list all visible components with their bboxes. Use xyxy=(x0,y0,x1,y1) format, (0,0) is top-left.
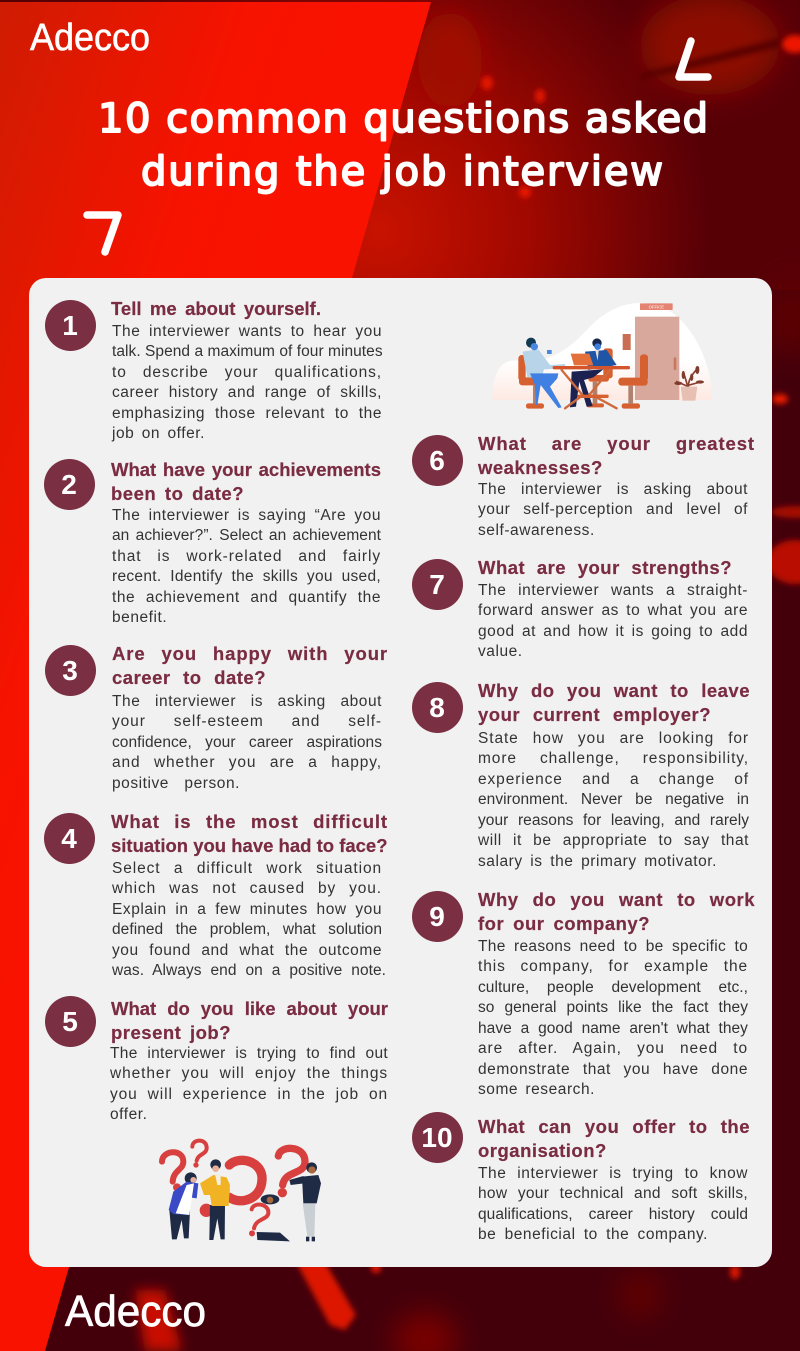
question 8: State how you are looking for xyxy=(478,730,749,747)
question 5 xyxy=(45,996,388,1123)
decorative corner: top right xyxy=(675,37,712,81)
question 8: Why do you want to leave xyxy=(478,680,750,700)
question 2: recent. Identify the skills you used, xyxy=(112,568,381,585)
question 9 xyxy=(412,888,755,1098)
question 9: demonstrate that you have done xyxy=(478,1061,748,1078)
question 1: to describe your qualifications, xyxy=(112,364,382,381)
question 10: be beneficial to the company. xyxy=(478,1226,708,1243)
question 9: culture, people development etc., xyxy=(478,979,748,996)
question 6: your self-perception and level of xyxy=(478,501,748,518)
illustration: office interview xyxy=(492,303,712,410)
question 7: value. xyxy=(478,643,523,660)
question 4: defined the problem, what solution xyxy=(112,921,382,938)
question 4 xyxy=(44,810,388,979)
question 5: What do you like about your xyxy=(111,998,388,1018)
question 2: The interviewer is saying “Are you xyxy=(112,507,381,524)
question 8 xyxy=(412,680,750,870)
question 9: this company, for example the xyxy=(478,958,748,975)
question 3: confidence, your career aspirations xyxy=(112,734,382,751)
title: during the job interview xyxy=(141,149,663,195)
question 1: The interviewer wants to hear you xyxy=(112,323,382,340)
question 2: 2 xyxy=(61,469,77,500)
question 8: will it be appropriate to say that xyxy=(478,832,749,849)
question 5: 5 xyxy=(62,1006,78,1037)
question 7: good at and how it is going to add xyxy=(478,623,748,640)
question 2: an achiever?”. Select an achievement xyxy=(112,527,381,544)
question 4: 4 xyxy=(61,823,77,854)
question 2: the achievement and quantify the xyxy=(112,589,381,606)
title xyxy=(98,96,708,195)
question 9: The reasons need to be specific to xyxy=(478,938,748,955)
question 3: positive person. xyxy=(112,775,240,792)
question 4: which was not caused by you. xyxy=(112,880,382,897)
decorative corner: left xyxy=(83,211,122,256)
question 1: emphasizing those relevant to the xyxy=(112,405,382,422)
question 10: qualifications, career history could xyxy=(478,1206,748,1223)
question 3: Are you happy with your xyxy=(112,642,388,664)
question 1: career history and range of skills, xyxy=(112,384,382,401)
question 4: situation you have had to face? xyxy=(111,834,388,856)
question 7 xyxy=(412,556,748,660)
question 4: Select a difficult work situation xyxy=(112,860,382,877)
question 4: you found and what the outcome xyxy=(112,942,382,959)
content panel xyxy=(29,278,772,1267)
question 7: 7 xyxy=(429,569,445,600)
question 5: present job? xyxy=(111,1022,231,1042)
question 10: 10 xyxy=(421,1122,453,1153)
question 9: for our company? xyxy=(478,912,650,934)
question 7: The interviewer wants a straight- xyxy=(478,582,748,599)
question 2: been to date? xyxy=(111,482,244,504)
illustration: people with question marks xyxy=(159,1138,321,1242)
illustration: office interview: OFFICE xyxy=(649,304,664,309)
question 3: and whether you are a happy, xyxy=(112,754,382,771)
question 9: so general points like the fact they xyxy=(478,999,748,1016)
question 8: salary is the primary motivator. xyxy=(478,853,717,870)
title: 10 common questions asked xyxy=(98,96,708,142)
question 8: your reasons for leaving, and rarely xyxy=(478,812,749,829)
question 1: talk. Spend a maximum of four minutes xyxy=(112,343,383,360)
question 10: The interviewer is trying to know xyxy=(478,1165,748,1182)
question 1: job on offer. xyxy=(112,425,205,442)
question 6: The interviewer is asking about xyxy=(478,481,748,498)
question 8: experience and a change of xyxy=(478,771,749,788)
question 5: The interviewer is trying to find out xyxy=(110,1045,388,1062)
question 8: your current employer? xyxy=(478,704,711,724)
question 6 xyxy=(412,432,755,539)
question 4: Explain in a few minutes how you xyxy=(112,901,382,918)
question 2: benefit. xyxy=(112,609,167,626)
question 8: more challenge, responsibility, xyxy=(478,750,749,767)
question 8: 8 xyxy=(429,692,445,723)
question 5: offer. xyxy=(110,1106,148,1123)
question 5: you will experience in the job on xyxy=(110,1086,388,1103)
question 2: that is work-related and fairly xyxy=(112,548,381,565)
question 6: 6 xyxy=(429,445,445,476)
question 3 xyxy=(45,642,388,792)
question 9: some research. xyxy=(478,1081,595,1098)
question 1 xyxy=(45,298,383,442)
question 9: Why do you want to work xyxy=(478,888,755,910)
question 7: What are your strengths? xyxy=(478,556,732,578)
question 9: are after. Again, you need to xyxy=(478,1040,748,1057)
question 7: forward answer as to what you are xyxy=(478,602,748,619)
question 2: What have your achievements xyxy=(111,458,381,480)
question 2 xyxy=(44,458,381,626)
question 6: weaknesses? xyxy=(478,456,603,478)
question 8: environment. Never be negative in xyxy=(478,791,749,808)
question 3: career to date? xyxy=(112,666,266,688)
question 10: What can you offer to the xyxy=(478,1116,750,1136)
question 9: have a good name aren't what they xyxy=(478,1020,748,1037)
question 6: What are your greatest xyxy=(478,432,755,454)
question 6: self-awareness. xyxy=(478,522,595,539)
question 1: Tell me about yourself. xyxy=(111,298,321,318)
question 10 xyxy=(412,1112,750,1243)
question 1: 1 xyxy=(62,310,78,341)
question 3: 3 xyxy=(62,655,78,686)
question 4: was. Always end on a positive note. xyxy=(112,962,386,979)
question 10: how your technical and soft skills, xyxy=(478,1185,748,1202)
question 3: your self-esteem and self- xyxy=(112,713,382,730)
question 9: 9 xyxy=(429,901,445,932)
question 5: whether you will enjoy the things xyxy=(110,1065,388,1082)
question 4: What is the most difficult xyxy=(111,810,388,832)
question 10: organisation? xyxy=(478,1140,607,1160)
question 3: The interviewer is asking about xyxy=(112,693,382,710)
